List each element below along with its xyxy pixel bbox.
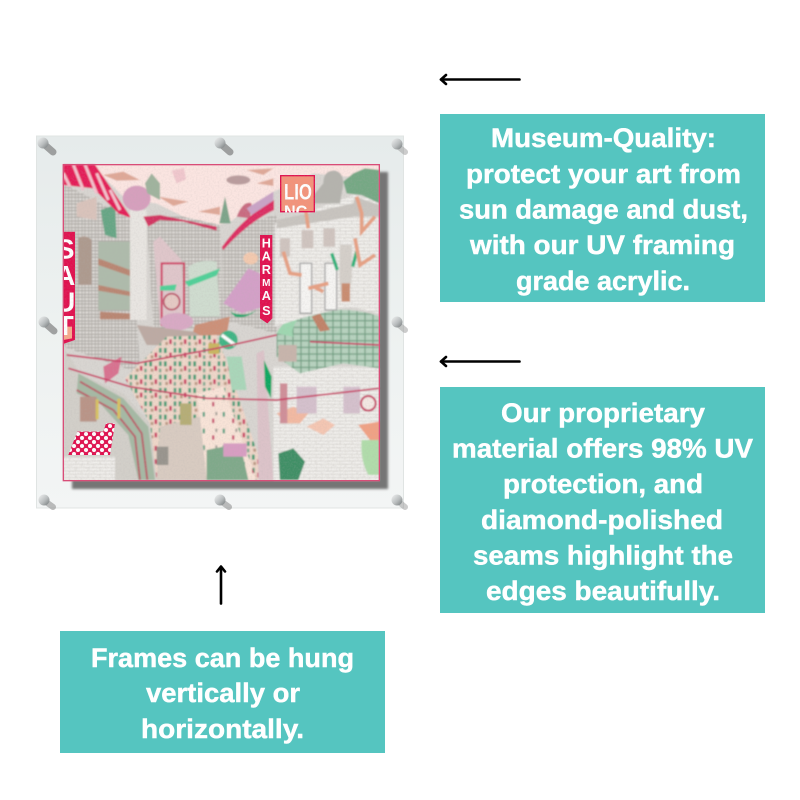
callout: museum quality: protect your art from <box>466 159 741 189</box>
callout: proprietary material <box>440 387 765 613</box>
callout: proprietary material: edges beautifully. <box>486 576 720 606</box>
callout: hanging orientation: vertically or <box>146 678 300 708</box>
tree <box>343 168 379 203</box>
LION sign: LIO <box>284 179 312 204</box>
centre street buildings <box>147 217 223 330</box>
callout: museum quality: with our UV framing <box>469 230 735 260</box>
HARMAR sign: R <box>262 263 271 277</box>
LION sign <box>280 175 315 212</box>
HARMAR sign <box>260 235 272 323</box>
SAUT sign: U <box>55 287 75 318</box>
arrow: pointing to frame edge <box>441 357 520 366</box>
figure in gown <box>223 268 264 313</box>
callout: proprietary material: Our proprietary <box>501 398 705 428</box>
crimson striped roof <box>63 165 132 218</box>
HARMAR sign: A <box>262 289 271 303</box>
lion statue <box>307 171 343 203</box>
clouds and balloons <box>103 168 273 215</box>
art drop shadow <box>72 172 388 489</box>
crowded road <box>125 335 267 480</box>
HARMAR sign: S <box>262 304 271 318</box>
SAUT sign <box>64 232 75 344</box>
artwork border <box>63 165 379 481</box>
artwork: illustrated street scene <box>55 165 379 481</box>
callout: museum quality: grade acrylic. <box>516 266 690 296</box>
callout: hanging orientation: Frames can be hung <box>91 643 354 673</box>
SAUT sign: T <box>57 310 74 341</box>
left buildings <box>63 183 140 373</box>
lower street shapes <box>180 403 192 425</box>
LION sign: NC <box>284 201 307 221</box>
callout: hanging orientation: horizontally. <box>141 714 304 744</box>
callout: proprietary material: diamond-polished <box>481 505 723 535</box>
flag and pole <box>257 350 273 480</box>
left bridge and steps <box>63 347 157 480</box>
sky <box>93 165 379 225</box>
salmon ornaments <box>192 317 230 337</box>
callout: proprietary material: material offers 98% UV <box>452 434 753 464</box>
acrylic frame with mounted artwork <box>36 136 405 508</box>
acrylic panel <box>36 136 404 508</box>
HARMAR sign: A <box>262 250 271 264</box>
callout: museum quality <box>440 114 765 302</box>
green glass roof <box>277 310 379 373</box>
callout: hanging orientation <box>60 631 385 753</box>
lower right white building <box>273 367 379 481</box>
right white building <box>275 195 379 327</box>
central tower <box>130 210 147 320</box>
salmon ribbons <box>283 197 375 292</box>
callout: museum quality: Museum-Quality: <box>491 123 716 153</box>
callout: museum quality: sun damage and dust, <box>459 194 748 224</box>
arrow: pointing to top of frame <box>441 75 520 84</box>
curved street building <box>222 215 277 333</box>
callout: proprietary material: protection, and <box>503 469 703 499</box>
airship <box>226 175 250 185</box>
checkered awning <box>68 423 115 455</box>
mounting standoffs <box>38 138 405 507</box>
fine ink texture over artwork <box>64 166 379 480</box>
string lights <box>67 335 379 400</box>
callout: proprietary material: seams highlight the <box>473 540 733 570</box>
SAUT sign: S <box>56 233 74 264</box>
arrow: pointing up to frame <box>217 566 225 604</box>
HARMAR sign: M <box>262 278 270 289</box>
SAUT sign: A <box>55 260 75 291</box>
HARMAR sign: H <box>262 236 271 250</box>
